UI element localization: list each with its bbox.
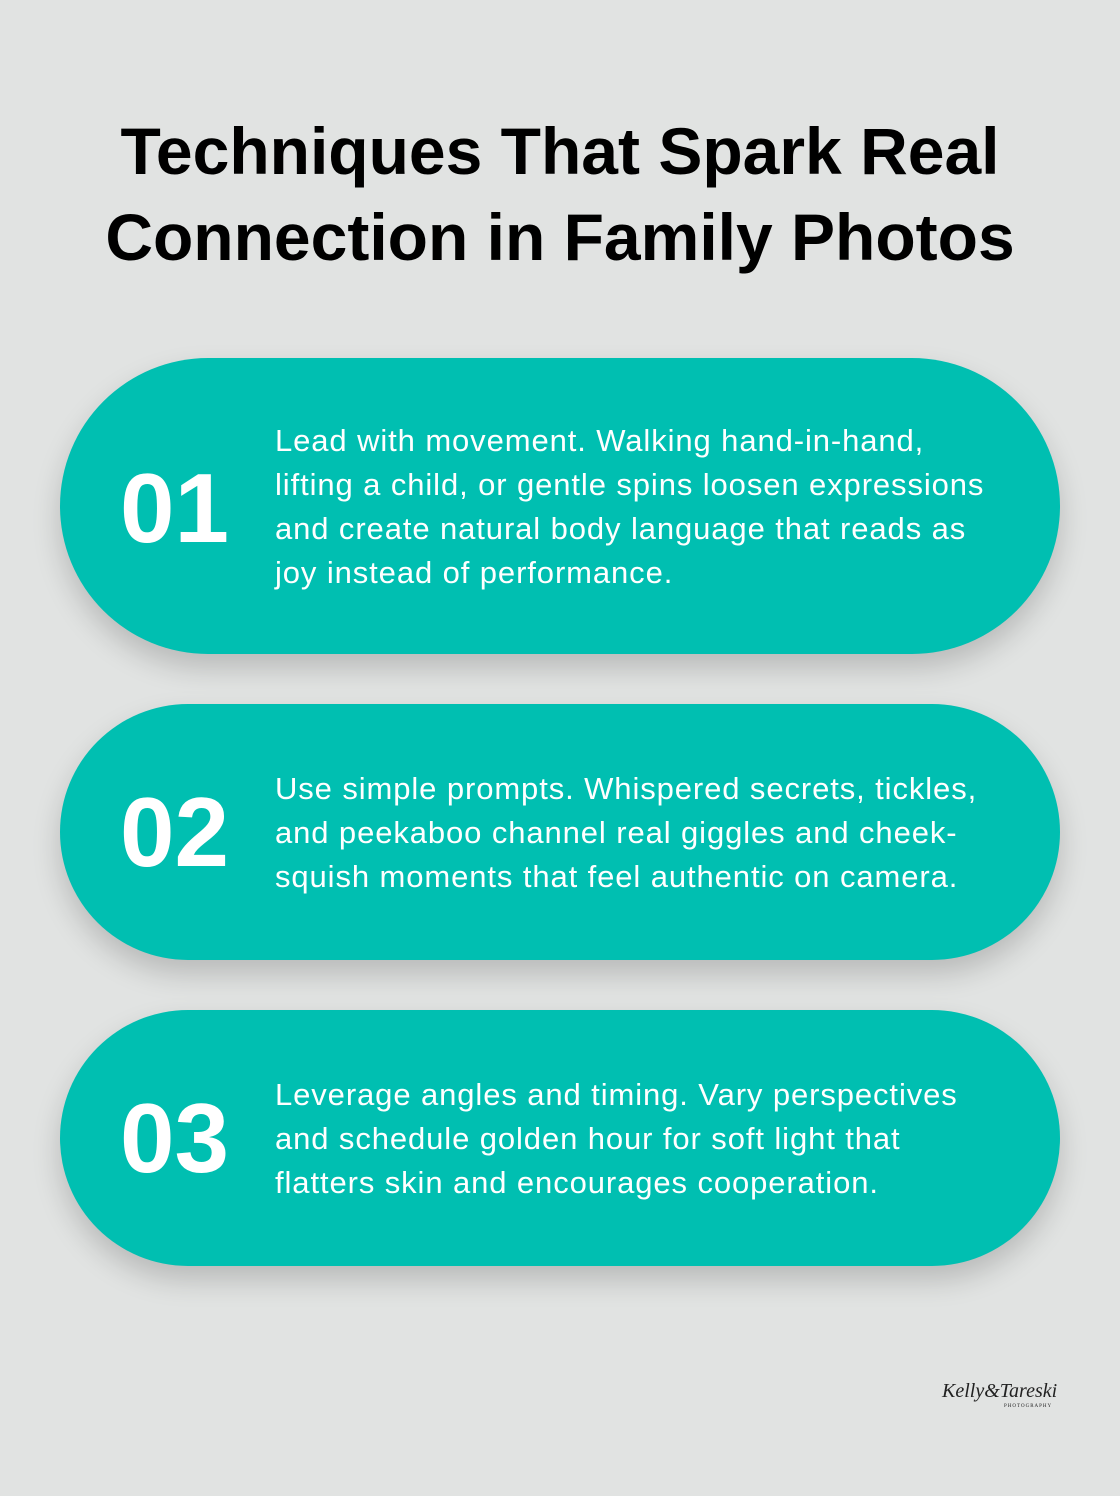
text 02: and peekaboo channel real giggles and cheek- — [275, 815, 957, 850]
text 03: flatters skin and encourages cooperation. — [275, 1165, 879, 1200]
text 01: Lead with movement. Walking hand-in-hand, — [275, 423, 924, 458]
logo: signature: PHOTOGRAPHY — [1004, 1404, 1052, 1409]
panel: step 02 — [60, 704, 1060, 960]
logo: signature: Kelly&Tareski — [942, 1380, 1057, 1402]
text 01 — [274, 423, 984, 590]
text 01: joy instead of performance. — [275, 555, 673, 590]
number 01: 01 — [120, 453, 229, 563]
panel: step 01 — [60, 358, 1060, 654]
text 03: Leverage angles and timing. Vary perspectives — [275, 1077, 958, 1112]
number 02: 02 — [120, 777, 229, 887]
text 03 — [275, 1077, 958, 1200]
title: Techniques That Spark Real — [120, 114, 1000, 188]
text 01: lifting a child, or gentle spins loosen expressions — [275, 467, 984, 502]
text 02 — [275, 771, 977, 894]
text 02: squish moments that feel authentic on camera. — [275, 859, 958, 894]
text 03: and schedule golden hour for soft light that — [275, 1121, 901, 1156]
title: Connection in Family Photos — [105, 200, 1015, 274]
text 01: and create natural body language that reads as — [275, 511, 966, 546]
number 03: 03 — [120, 1083, 229, 1193]
panel: step 03 — [60, 1010, 1060, 1266]
title — [105, 114, 1015, 274]
text 02: Use simple prompts. Whispered secrets, tickles, — [275, 771, 977, 806]
